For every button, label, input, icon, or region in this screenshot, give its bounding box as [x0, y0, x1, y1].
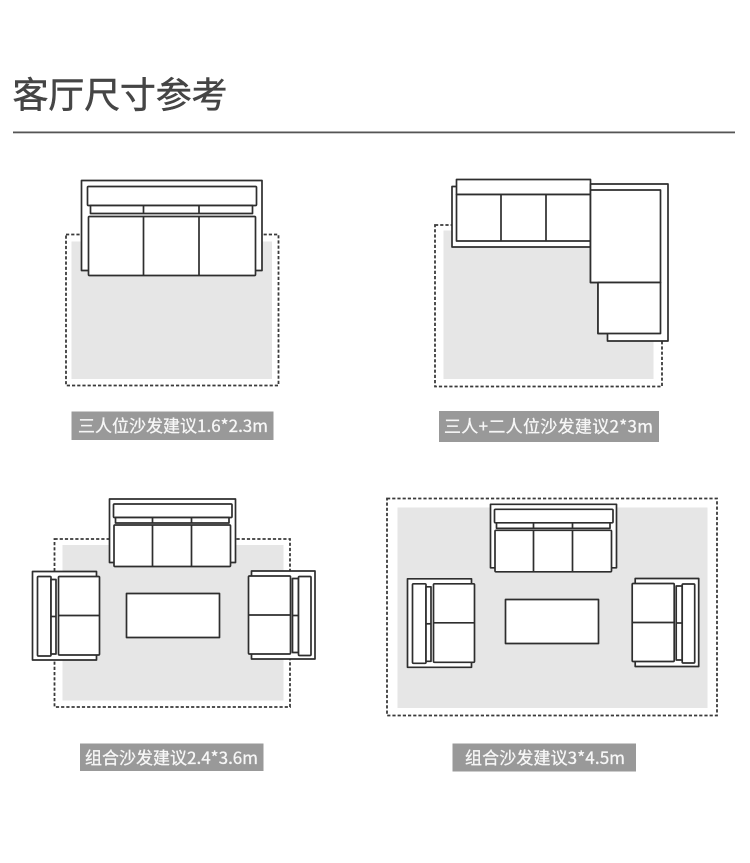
- coffee table: [126, 594, 220, 638]
- title rule: [13, 132, 735, 133]
- size label: 组合沙发建议2.4*3.6m: [85, 744, 258, 769]
- panel: three-seat sofa: [66, 180, 278, 440]
- rug area: [435, 225, 662, 386]
- coffee table: [506, 600, 598, 644]
- left armchair sofa: [408, 579, 474, 667]
- three-seat sofa: [490, 504, 616, 572]
- size label: 三人位沙发建议1.6*2.3m: [78, 412, 268, 437]
- panel: combination sofa 2.4 by 3.6: [32, 499, 315, 771]
- corner sofa: [452, 180, 668, 341]
- panel: three plus two seat sofa: [435, 180, 668, 442]
- right armchair sofa: [632, 578, 699, 666]
- size label: 组合沙发建议3*4.5m: [465, 744, 625, 769]
- left armchair sofa: [32, 572, 100, 660]
- three-seat sofa: [110, 499, 236, 566]
- three-seat sofa: [82, 180, 262, 276]
- size label: 三人+二人位沙发建议2*3m: [444, 412, 653, 438]
- rug area: [387, 498, 717, 716]
- rug area: [54, 539, 290, 707]
- rug area: [66, 234, 278, 386]
- right armchair sofa: [248, 571, 315, 659]
- panel: combination sofa 3 by 4.5: [387, 498, 717, 772]
- title: 客厅尺寸参考: [12, 66, 228, 118]
